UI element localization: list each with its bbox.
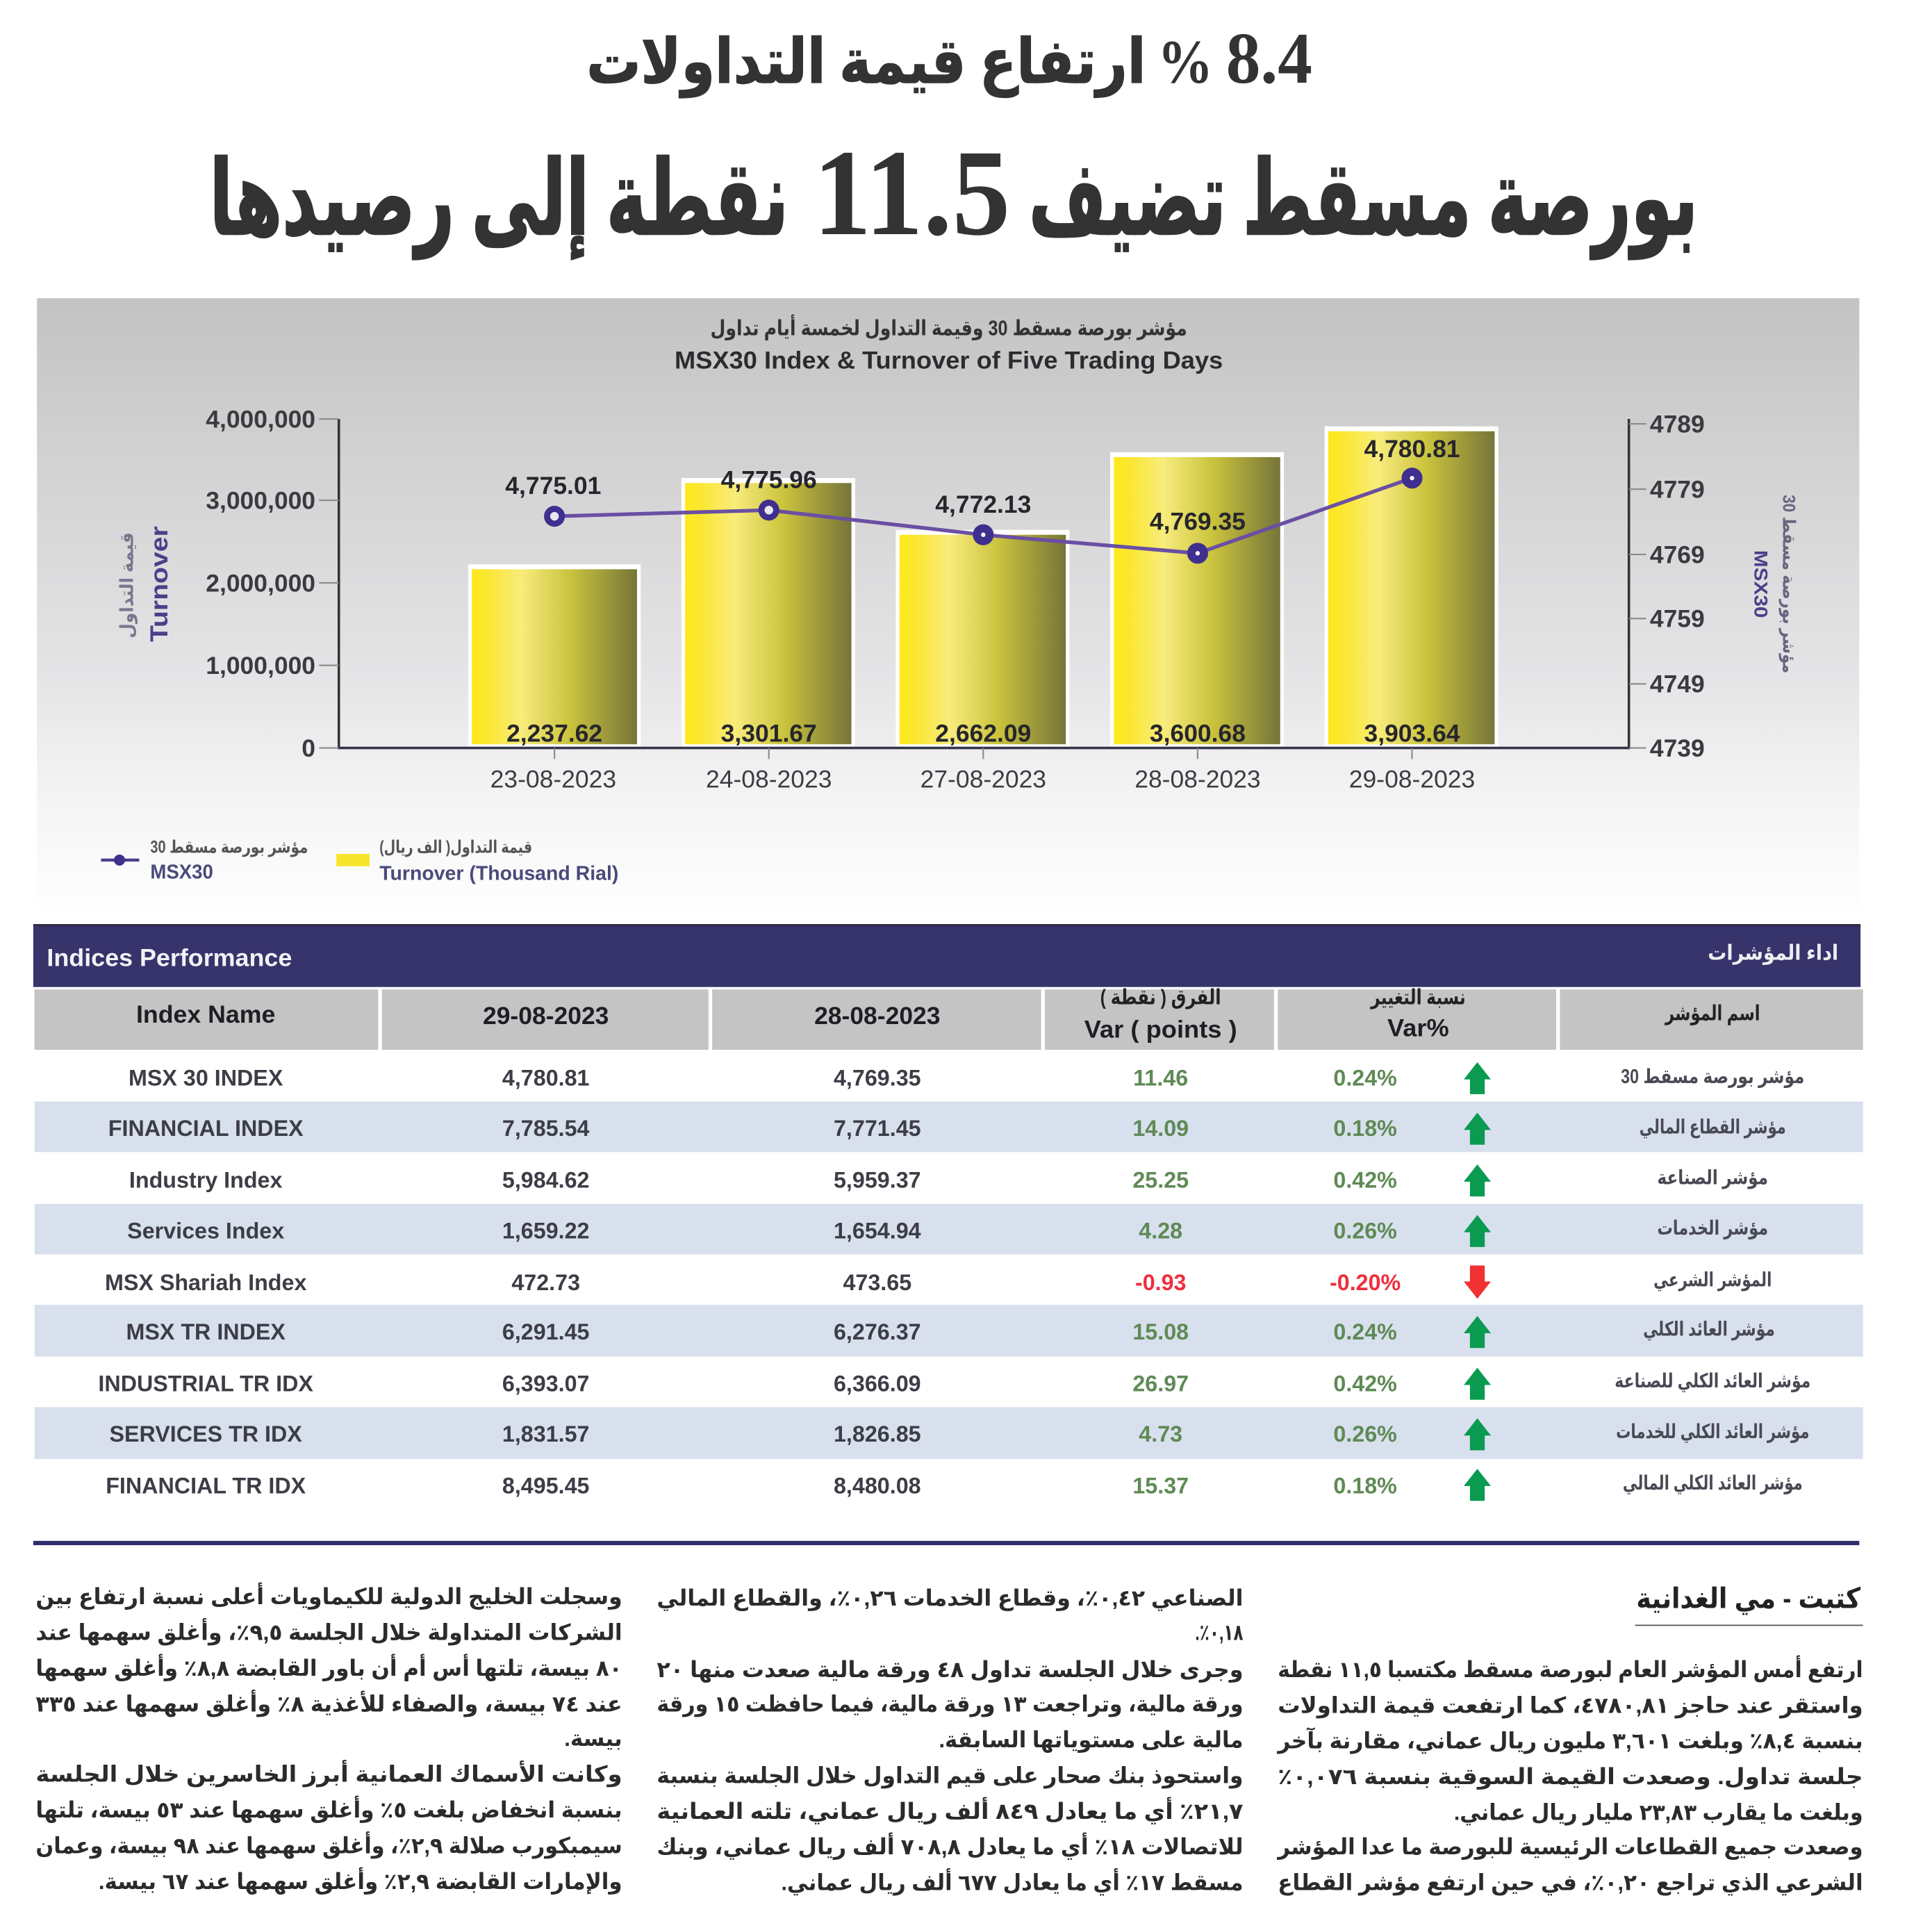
- row: SERVICES TR IDX: مؤشر العائد الكلي للخدمات: [1616, 1421, 1810, 1443]
- bar: 29-08-2023: [1325, 427, 1498, 748]
- row: SERVICES TR IDX: 0.26%: [1333, 1421, 1397, 1446]
- row: SERVICES TR IDX: 1,826.85: [834, 1421, 921, 1446]
- legend: MSX30: مؤشر بورصة مسقط 30: [150, 838, 308, 857]
- row: Industry Index: [129, 1164, 1768, 1196]
- legend: turnover: [336, 838, 618, 884]
- row: Industry Index: 0.42%: [1333, 1168, 1397, 1193]
- main headline: [210, 125, 1698, 261]
- legend: MSX30: [101, 838, 308, 884]
- left axis: 1,000,000: [206, 652, 315, 679]
- article text: left column: وكانت الأسماك العمانية أبرز الخاسرين خلال الجلسة: [35, 1760, 622, 1788]
- subtitle: 8.4: [1226, 18, 1312, 99]
- line value labels: 4,775.96: [721, 465, 817, 493]
- article text: right column: وصعدت جميع القطاعات الرئيسية للبورصة ما عدا المؤشر: [1276, 1834, 1863, 1860]
- row: MSX TR INDEX: MSX TR INDEX: [126, 1319, 286, 1344]
- bar: 23-08-2023: [468, 564, 641, 748]
- row: Services Index: [35, 1204, 1863, 1254]
- bar: 27-08-2023: 2,662.09: [935, 720, 1031, 748]
- legend: MSX30: MSX30: [150, 861, 213, 884]
- right axis: 4759: [1650, 605, 1705, 633]
- row: FINANCIAL INDEX: 0.18%: [1333, 1116, 1397, 1141]
- row: SERVICES TR IDX: [35, 1407, 1863, 1459]
- article text: right column: وبلغت ما يقارب ٢٣,٨٣ مليار ريال عماني.: [1454, 1800, 1863, 1826]
- table column header row: 28-08-2023: [814, 1002, 941, 1030]
- row: INDUSTRIAL TR IDX: [98, 1368, 1810, 1400]
- row: INDUSTRIAL TR IDX: مؤشر العائد الكلي للصناعة: [1615, 1370, 1810, 1392]
- article text: middle column: الصناعي ٠,٤٢٪، وقطاع الخدمات ٠,٢٦٪، والقطاع المالي: [657, 1585, 1244, 1611]
- article text: left column: ٨٠ بيسة، تلتها أس أم أن باور القابضة ٨,٨٪ وأغلق سهمها: [35, 1654, 622, 1681]
- row: MSX TR INDEX: 6,291.45: [502, 1319, 590, 1344]
- article text: middle column: للاتصالات ١٨٪ أي ما يعادل ٧٠٨,٨ ألف ريال عماني، وبنك: [657, 1832, 1244, 1860]
- left axis: [206, 405, 339, 762]
- row: Industry Index: 25.25: [1132, 1168, 1189, 1193]
- line value labels: [505, 435, 1460, 536]
- bar: 28-08-2023: 3,600.68: [1150, 720, 1246, 748]
- left axis: 3,000,000: [206, 486, 315, 514]
- row: INDUSTRIAL TR IDX: 6,393.07: [502, 1371, 590, 1396]
- bar: 23-08-2023: 2,237.62: [506, 720, 602, 748]
- row: MSX 30 INDEX: مؤشر بورصة مسقط 30: [1621, 1066, 1804, 1088]
- right axis: [1629, 411, 1705, 762]
- table column header row: Index Name: [136, 1000, 275, 1028]
- row: INDUSTRIAL TR IDX: INDUSTRIAL TR IDX: [98, 1371, 313, 1396]
- line value labels: 4,769.35: [1150, 508, 1246, 536]
- row: FINANCIAL TR IDX: 15.37: [1132, 1474, 1189, 1499]
- x axis with date labels: 23-08-2023: [490, 765, 616, 793]
- article text: middle column: ٠,١٨٪.: [1195, 1620, 1244, 1645]
- article text: middle column: ورقة مالية، وتراجعت ١٣ ورقة مالية، فيما حافظت ١٥ ورقة: [657, 1691, 1244, 1717]
- right axis: 4769: [1650, 541, 1705, 569]
- line value labels: 4,780.81: [1364, 435, 1460, 463]
- right axis: 4789: [1650, 411, 1705, 438]
- row: INDUSTRIAL TR IDX: 26.97: [1132, 1371, 1189, 1396]
- row: MSX TR INDEX: 6,276.37: [834, 1319, 921, 1344]
- bar: 27-08-2023: [895, 530, 1069, 748]
- row: SERVICES TR IDX: 1,831.57: [502, 1421, 590, 1446]
- article text: middle column: واستحوذ بنك صحار على قيم التداول خلال الجلسة بنسبة: [657, 1763, 1244, 1788]
- main headline: 11.5: [814, 125, 1010, 261]
- left axis: 4,000,000: [206, 405, 315, 433]
- article text: right column: بنسبة ٨,٤٪ وبلغت ٣,٦٠١ مليون ريال عماني، مقارنة بآخر: [1276, 1727, 1863, 1754]
- right axis: 4779: [1650, 476, 1705, 504]
- x axis with date labels: 28-08-2023: [1134, 765, 1261, 793]
- row: FINANCIAL INDEX: [35, 1102, 1863, 1152]
- row: MSX TR INDEX: مؤشر العائد الكلي: [1643, 1319, 1775, 1341]
- article text: middle column: مسقط ١٧٪ أي ما يعادل ٦٧٧ ألف ريال عماني.: [781, 1868, 1244, 1896]
- row: MSX 30 INDEX: 4,780.81: [502, 1066, 590, 1091]
- row: FINANCIAL TR IDX: 8,495.45: [502, 1474, 590, 1499]
- row: MSX TR INDEX: 0.24%: [1333, 1319, 1397, 1344]
- row: FINANCIAL INDEX: 7,771.45: [834, 1116, 921, 1141]
- article text: right column: ارتفع أمس المؤشر العام لبورصة مسقط مكتسبا ١١,٥ نقطة: [1278, 1655, 1863, 1683]
- article text: left column: سيمبكورب صلالة ٢,٩٪، وأغلق سهمها عند ٩٨ بيسة، وعمان: [35, 1831, 622, 1858]
- subtitle: ارتفاع قيمة التداولات: [586, 28, 1146, 98]
- article text: left column: والإمارات القابضة ٢,٩٪ وأغلق سهمها عند ٦٧ بيسة.: [99, 1867, 622, 1895]
- right axis title: [1751, 495, 1797, 673]
- row: MSX Shariah Index: MSX Shariah Index: [105, 1270, 306, 1295]
- legend: turnover: قيمة التداول( الف ريال): [379, 838, 532, 857]
- row: FINANCIAL TR IDX: مؤشر العائد الكلي المالي: [1623, 1472, 1803, 1494]
- article text: middle column: ٢١,٧٪ أي ما يعادل ٨٤٩ ألف ريال عماني، تلته العمانية: [657, 1797, 1244, 1824]
- article text: middle column: مالية على مستوياتها السابقة.: [939, 1727, 1244, 1753]
- bar: 29-08-2023: 3,903.64: [1364, 720, 1460, 748]
- row: MSX Shariah Index: 473.65: [843, 1270, 911, 1295]
- table column header row: اسم المؤشر: [1665, 1003, 1760, 1026]
- row: MSX Shariah Index: المؤشر الشرعي: [1653, 1269, 1772, 1292]
- x axis with date labels: [339, 748, 1629, 793]
- row: Services Index: 1,659.22: [502, 1218, 590, 1243]
- row: SERVICES TR IDX: SERVICES TR IDX: [110, 1421, 302, 1446]
- legend: turnover: Turnover (Thousand Rial): [379, 862, 618, 884]
- table column header row: 29-08-2023: [483, 1002, 609, 1030]
- right axis: 4739: [1650, 734, 1705, 762]
- row: INDUSTRIAL TR IDX: 0.42%: [1333, 1371, 1397, 1396]
- left axis: 2,000,000: [206, 569, 315, 597]
- subtitle: %: [1157, 28, 1213, 97]
- row: Services Index: 1,654.94: [834, 1218, 921, 1243]
- bar: 28-08-2023: [1110, 452, 1284, 748]
- row: Industry Index: مؤشر الصناعة: [1657, 1166, 1768, 1189]
- row: MSX Shariah Index: 472.73: [511, 1270, 580, 1295]
- line value labels: 4,772.13: [935, 490, 1031, 518]
- row: MSX TR INDEX: 15.08: [1132, 1319, 1189, 1344]
- table title band: [33, 924, 1860, 987]
- row: FINANCIAL INDEX: 14.09: [1132, 1116, 1189, 1141]
- row: FINANCIAL TR IDX: 0.18%: [1333, 1474, 1397, 1499]
- table column header row: Var ( points ): [1084, 1015, 1237, 1043]
- article text: left column: عند ٧٤ بيسة، والصفاء للأغذية ٨٪ وأغلق سهمها عند ٣٣٥: [35, 1689, 622, 1717]
- icon: up arrow: [1464, 1164, 1491, 1196]
- x axis with date labels: 24-08-2023: [706, 765, 832, 793]
- article text: right column: الشرعي الذي تراجع ٠,٢٠٪، في حين ارتفع مؤشر القطاع: [1278, 1870, 1863, 1896]
- row: Industry Index: 5,984.62: [502, 1168, 590, 1193]
- left axis title: قيمة التداول: [117, 532, 138, 638]
- row: MSX 30 INDEX: 0.24%: [1333, 1066, 1397, 1091]
- article text: right column: [1276, 1655, 1863, 1896]
- table column header row: [35, 986, 1863, 1050]
- row: Services Index: مؤشر الخدمات: [1657, 1217, 1768, 1239]
- row: MSX Shariah Index: -0.93: [1135, 1270, 1187, 1295]
- row: SERVICES TR IDX: 4.73: [1139, 1421, 1182, 1446]
- row: Services Index: 0.26%: [1333, 1218, 1397, 1243]
- icon: up arrow: [1464, 1368, 1491, 1400]
- icon: down arrow: [1464, 1265, 1491, 1298]
- icon: up arrow: [1464, 1469, 1491, 1501]
- icon: up arrow: [1464, 1113, 1491, 1145]
- article text: left column: [35, 1582, 622, 1895]
- article text: left column: بنسبة انخفاض بلغت ٥٪ وأغلق سهمها عند ٥٣ بيسة، تلتها: [35, 1795, 622, 1823]
- right axis title: مؤشر بورصة مسقط 30: [1778, 495, 1797, 673]
- chart title: مؤشر بورصة مسقط 30 وقيمة التداول لخمسة أيام تداول: [710, 314, 1187, 340]
- chart title: MSX30 Index & Turnover of Five Trading Days: [675, 346, 1223, 374]
- row: Industry Index: 5,959.37: [834, 1168, 921, 1193]
- table title band: Indices Performance: [47, 943, 292, 971]
- row: MSX Shariah Index: [105, 1265, 1772, 1298]
- left axis title: [117, 526, 173, 642]
- row: FINANCIAL INDEX: FINANCIAL INDEX: [108, 1116, 304, 1141]
- icon: up arrow: [1464, 1418, 1491, 1450]
- chart title: [675, 314, 1223, 374]
- bar: 24-08-2023: [682, 478, 855, 748]
- main headline: نقطة إلى رصيدها: [210, 142, 789, 260]
- row: MSX 30 INDEX: 11.46: [1133, 1066, 1188, 1091]
- right axis: 4749: [1650, 670, 1705, 698]
- row: MSX Shariah Index: -0.20%: [1330, 1270, 1401, 1295]
- table column header row: الفرق ( نقطة ): [1100, 986, 1221, 1009]
- left axis: 0: [302, 734, 315, 762]
- panel: MSX30 chart: [37, 298, 1859, 918]
- x axis with date labels: 29-08-2023: [1349, 765, 1475, 793]
- table bottom rule: [33, 1541, 1859, 1545]
- MSX30 line series: [544, 468, 1423, 563]
- x axis with date labels: 27-08-2023: [920, 765, 1046, 793]
- right axis title: MSX30: [1751, 550, 1772, 618]
- article text: middle column: وجرى خلال الجلسة تداول ٤٨ ورقة مالية صعدت منها ٢٠: [657, 1657, 1244, 1683]
- article text: left column: الشركات المتداولة خلال الجلسة ٩,٥٪، وأغلق سهمها عند: [35, 1618, 622, 1646]
- article text: right column: واستقر عند حاجز ٤٧٨٠,٨١، كما ارتفعت قيمة التداولات: [1278, 1692, 1863, 1718]
- bar: 24-08-2023: 3,301.67: [721, 720, 817, 748]
- icon: up arrow: [1464, 1062, 1491, 1094]
- row: FINANCIAL INDEX: 7,785.54: [502, 1116, 590, 1141]
- table column header row: Var%: [1387, 1014, 1449, 1042]
- row: Services Index: Services Index: [127, 1218, 284, 1243]
- article text: right column: جلسة تداول. وصعدت القيمة السوقية بنسبة ٠,٠٧٦٪: [1278, 1764, 1863, 1790]
- left axis title: Turnover: [145, 526, 173, 642]
- row: MSX 30 INDEX: [129, 1062, 1804, 1094]
- row: Industry Index: Industry Index: [129, 1168, 282, 1193]
- row: FINANCIAL TR IDX: FINANCIAL TR IDX: [106, 1474, 306, 1499]
- table title band: اداء المؤشرات: [1708, 942, 1838, 966]
- article text: left column: بيسة.: [564, 1726, 622, 1751]
- row: INDUSTRIAL TR IDX: 6,366.09: [834, 1371, 921, 1396]
- article text: left column: وسجلت الخليج الدولية للكيماويات أعلى نسبة ارتفاع بين: [35, 1582, 622, 1610]
- icon: up arrow: [1464, 1316, 1491, 1348]
- row: FINANCIAL TR IDX: [106, 1469, 1803, 1501]
- row: MSX 30 INDEX: MSX 30 INDEX: [129, 1066, 283, 1091]
- row: MSX 30 INDEX: 4,769.35: [834, 1066, 921, 1091]
- icon: up arrow: [1464, 1215, 1491, 1247]
- line value labels: 4,775.01: [505, 472, 601, 500]
- table column header row: نسبة التغيير: [1370, 986, 1466, 1009]
- row: MSX TR INDEX: [35, 1305, 1863, 1357]
- row: FINANCIAL TR IDX: 8,480.08: [834, 1474, 921, 1499]
- row: Services Index: 4.28: [1139, 1218, 1182, 1243]
- byline: كتبت - مي الغدانية: [1636, 1583, 1860, 1615]
- article text: middle column: [657, 1585, 1244, 1896]
- row: FINANCIAL INDEX: مؤشر القطاع المالي: [1640, 1116, 1786, 1139]
